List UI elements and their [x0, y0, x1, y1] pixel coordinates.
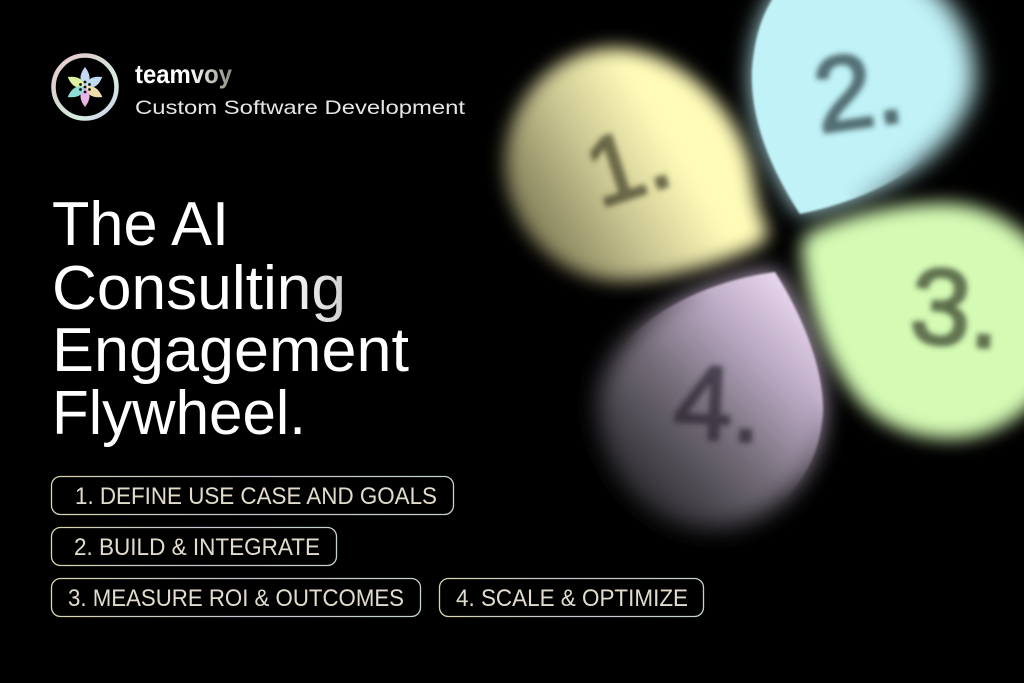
pill: step 2 [52, 528, 336, 566]
petal 1: yellow [505, 48, 768, 281]
title: Engagement [52, 316, 409, 385]
pill: step 1 [52, 476, 454, 514]
petal 1: yellow: 1. [573, 101, 682, 228]
brand name: teamvoy [135, 59, 232, 89]
icon: flower in ring [54, 56, 116, 118]
pill: step 1: 1. DEFINE USE CASE AND GOALS [75, 483, 437, 510]
pill: step 3: 3. MEASURE ROI & OUTCOMES [68, 585, 404, 612]
tagline: Custom Software Development [135, 97, 466, 119]
logo: teamvoy [54, 56, 466, 119]
petal 4: purple [598, 272, 823, 528]
petal 3: green [802, 203, 1024, 439]
petal 3: green: 3. [907, 244, 1005, 371]
title: Consulting [52, 254, 346, 323]
pill: step 3 [52, 578, 420, 616]
title: The AI [52, 190, 229, 259]
pill: step 4 [440, 578, 704, 616]
pill: step 2: 2. BUILD & INTEGRATE [74, 534, 320, 561]
flywheel petals [505, 0, 1024, 528]
step pills [52, 476, 704, 616]
petal 2: blue [752, 0, 975, 214]
petal 2: blue: 2. [807, 27, 910, 156]
title [52, 190, 409, 448]
petal 4: purple: 4. [671, 344, 765, 465]
pill: step 4: 4. SCALE & OPTIMIZE [456, 585, 688, 612]
title: Flywheel. [52, 379, 306, 448]
